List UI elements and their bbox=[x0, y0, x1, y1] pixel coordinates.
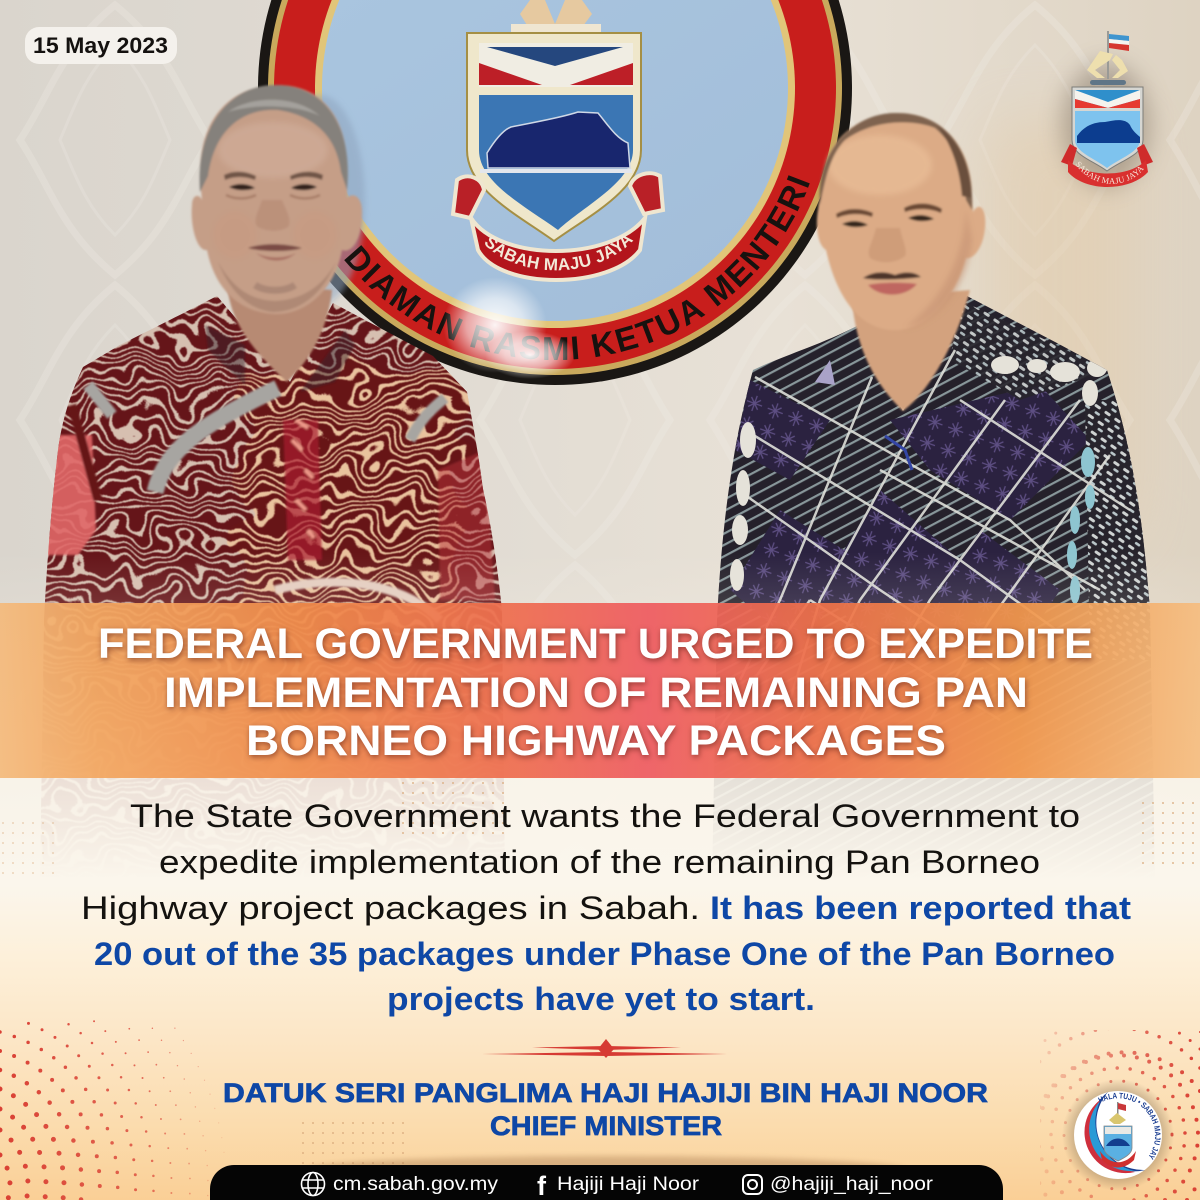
left man face features bbox=[224, 172, 323, 180]
shadow above footer bar bbox=[306, 1156, 906, 1184]
body paragraph: projects have yet to start. bbox=[387, 981, 815, 1017]
sign crest bbox=[450, 0, 666, 282]
sign text on curve: DIAMAN RASMI KETUA MENTERI bbox=[344, 175, 810, 360]
sign ribbon: SABAH MAJU JAYA bbox=[485, 236, 634, 270]
body paragraph bbox=[81, 798, 1131, 1017]
instagram handle: @hajiji_haji_noor bbox=[770, 1174, 934, 1195]
headline banner bbox=[0, 603, 1200, 778]
headline bbox=[98, 620, 1093, 765]
right man shirt lattice bbox=[748, 349, 1130, 648]
left man shirt bbox=[41, 296, 504, 838]
crest shield bbox=[1072, 87, 1143, 171]
left man head bbox=[192, 85, 362, 314]
headline: IMPLEMENTATION OF REMAINING PAN bbox=[164, 669, 1028, 717]
seal crescents bbox=[1084, 1092, 1145, 1173]
attribution: name and title bbox=[223, 1078, 988, 1141]
body paragraph: expedite implementation of the remaining Pan Borneo bbox=[159, 844, 1040, 880]
attribution: name and title: DATUK SERI PANGLIMA HAJI HAJIJI BIN HAJI NOOR bbox=[223, 1078, 988, 1108]
halftone dots: right bbox=[1040, 1030, 1200, 1200]
right man shirt bbox=[713, 296, 1154, 838]
date pill: 15 May 2023 bbox=[33, 33, 168, 58]
sign ribbon bbox=[450, 171, 666, 282]
headline: FEDERAL GOVERNMENT URGED TO EXPEDITE bbox=[98, 620, 1093, 668]
right man shirt light blobs bbox=[730, 356, 1107, 591]
body paragraph: 20 out of the 35 packages under Phase One of the Pan Borneo bbox=[94, 936, 1115, 972]
date pill bbox=[25, 27, 177, 64]
left man hair bbox=[200, 85, 348, 192]
right man neck bbox=[852, 290, 970, 411]
facebook name: Hajiji Haji Noor bbox=[557, 1174, 700, 1195]
right man head bbox=[817, 113, 985, 330]
crest jewels bbox=[1090, 80, 1126, 85]
man on the left bbox=[41, 84, 504, 842]
seal crest bbox=[1100, 1102, 1136, 1168]
man on the right bbox=[713, 112, 1154, 838]
divider ornament bbox=[482, 1039, 727, 1058]
right man hair bbox=[820, 113, 972, 210]
crest flag bbox=[1107, 31, 1129, 79]
icon: instagram bbox=[743, 1175, 762, 1194]
crest of Sabah, top right bbox=[1052, 31, 1160, 196]
crest arms bbox=[1087, 51, 1128, 78]
body paragraph: The State Government wants the Federal Government to bbox=[130, 798, 1080, 834]
crest ribbon with motto bbox=[1061, 144, 1153, 187]
seal: Hala Tuju Sabah Maju Jaya: HALA TUJU • SABAH MAJU JAYA bbox=[1098, 1092, 1160, 1160]
photo: two leaders in front of the Sabah crest bbox=[0, 0, 1200, 844]
halftone dots: left bbox=[0, 1020, 224, 1200]
body paragraph: Highway project packages in Sabah. bbox=[81, 890, 700, 926]
crest ribbon with motto: SABAH MAJU JAYA bbox=[1076, 162, 1144, 184]
wall sign: Kediaman Rasmi Ketua Menteri bbox=[258, 0, 852, 385]
attribution: name and title: CHIEF MINISTER bbox=[490, 1111, 722, 1141]
headline: BORNEO HIGHWAY PACKAGES bbox=[246, 717, 946, 765]
social media footer bar bbox=[210, 1165, 1003, 1200]
left man neck bbox=[227, 280, 332, 382]
website: cm.sabah.gov.my bbox=[333, 1174, 499, 1195]
icon: globe bbox=[302, 1172, 324, 1196]
decorative faint dot patches bbox=[0, 780, 1200, 1165]
right man face features bbox=[836, 204, 942, 218]
body paragraph: It has been reported that bbox=[710, 890, 1131, 926]
